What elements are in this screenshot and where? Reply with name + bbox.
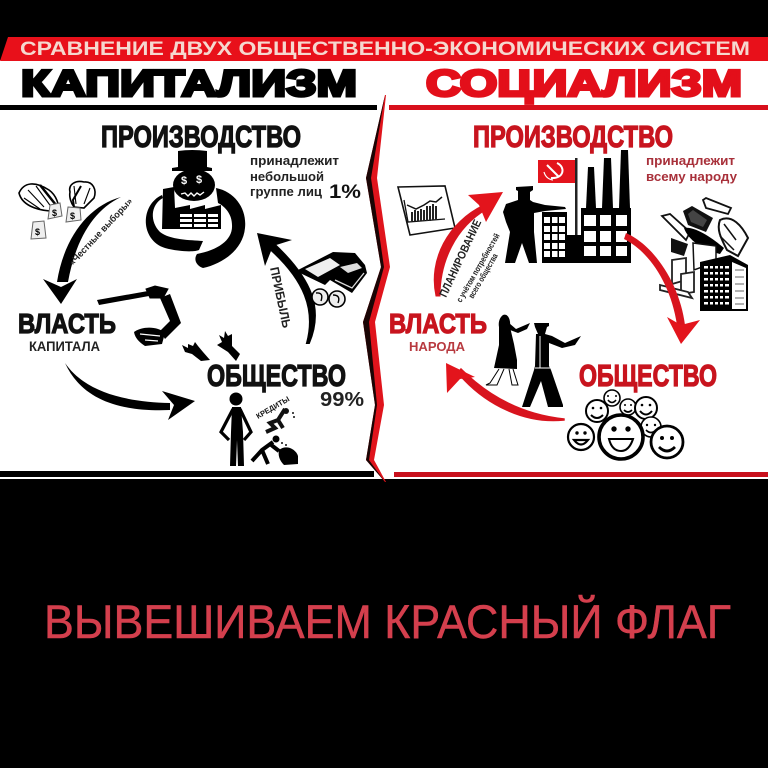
icon: figures crushed by credits [252, 394, 298, 465]
face upper left [586, 400, 608, 422]
arrow: from hands down to power [43, 197, 121, 304]
heading: power of capital: КАПИТАЛА [29, 339, 100, 354]
arrow: planning up to production [434, 192, 503, 296]
icon: capitalist with factory [146, 150, 245, 268]
icon: capitalist with factory: $ [181, 175, 187, 187]
arrow: production to society [624, 233, 700, 344]
text: belongs to small group: принадлежит [250, 154, 339, 168]
text: belongs to all the people: принадлежит [646, 154, 735, 168]
slogan: ВЫВЕШИВАЕМ КРАСНЫЙ ФЛАГ [44, 595, 731, 648]
heading: socialism: СОЦИАЛИЗМ [426, 63, 742, 104]
icon: hands with money bags: $ [35, 227, 40, 237]
face small middle [620, 399, 636, 415]
icon: figures crushed by credits: КРЕДИТЫ [254, 394, 291, 421]
icon: arm with baton [97, 286, 181, 346]
text: planning for the needs of society: с учётом потребностей [454, 231, 502, 304]
text: profit: ПРИБЫЛЬ [267, 266, 294, 329]
text: 99 percent: 99% [320, 389, 364, 411]
icon: hands with money bags: $ [52, 208, 57, 218]
icon: red flag with hammer and sickle [538, 158, 578, 238]
face right middle [641, 417, 661, 437]
heading: society (capitalism): ОБЩЕСТВО [207, 358, 346, 393]
heading: power of capital: ВЛАСТЬ [18, 308, 116, 339]
face upper right [635, 397, 657, 419]
panel: socialism [389, 119, 748, 459]
face left [568, 424, 594, 450]
arrow: society to power of the people [446, 363, 564, 421]
icon: worker pointing at factory [503, 186, 566, 263]
panel: capitalism [18, 119, 367, 466]
icon: capitalist with factory: $ [196, 174, 202, 186]
face big center [599, 415, 643, 459]
text: planning for the needs of society: всего общества [466, 252, 500, 300]
heading: production (socialism): ПРОИЗВОДСТВО [473, 119, 673, 154]
banner: top red band with title [0, 37, 768, 61]
icon: poor man with empty pockets [221, 392, 251, 466]
icon: woman and man with ballots [486, 315, 581, 407]
icon: reaching hands [182, 331, 240, 361]
text: belongs to all the people [646, 154, 737, 184]
icon: hands with money bags [19, 181, 95, 239]
text: belongs to small group [250, 154, 361, 203]
arrow: profit to production [257, 233, 315, 343]
text: planning for the needs of society [438, 218, 502, 304]
icon: money and coins [298, 252, 367, 307]
text: planning for the needs of society: ПЛАНИРОВАНИЕ [438, 218, 484, 299]
arrow: power to society [65, 363, 195, 420]
heading: society (socialism): ОБЩЕСТВО [579, 358, 717, 393]
text: honest elections: «Честные выборы» [67, 196, 135, 268]
icon: happy faces crowd [568, 390, 683, 459]
heading: capitalism: КАПИТАЛИЗМ [21, 63, 357, 104]
banner: top red band with title: СРАВНЕНИЕ ДВУХ ОБЩЕСТВЕННО-ЭКОНОМИЧЕСКИХ СИСТЕМ [20, 39, 750, 60]
heading: power of capital [18, 308, 116, 354]
icon: hands with money bags: $ [70, 211, 75, 221]
divider: jagged lightning line between panels [363, 95, 390, 482]
icon: consumer goods and apartment building [660, 198, 748, 311]
face right [651, 426, 683, 458]
heading: power of the people: ВЛАСТЬ [389, 308, 487, 339]
face small top [604, 390, 620, 406]
heading: production (capitalism): ПРОИЗВОДСТВО [101, 119, 301, 154]
text: belongs to small group: небольшой [250, 170, 324, 184]
heading: power of the people [389, 308, 487, 354]
text: belongs to small group: группе лиц [250, 185, 322, 199]
heading: power of the people: НАРОДА [409, 339, 466, 354]
icon: factory [542, 150, 631, 263]
text: belongs to small group: 1% [329, 182, 361, 203]
text: belongs to all the people: всему народу [646, 170, 737, 184]
icon: chart document [398, 186, 455, 235]
